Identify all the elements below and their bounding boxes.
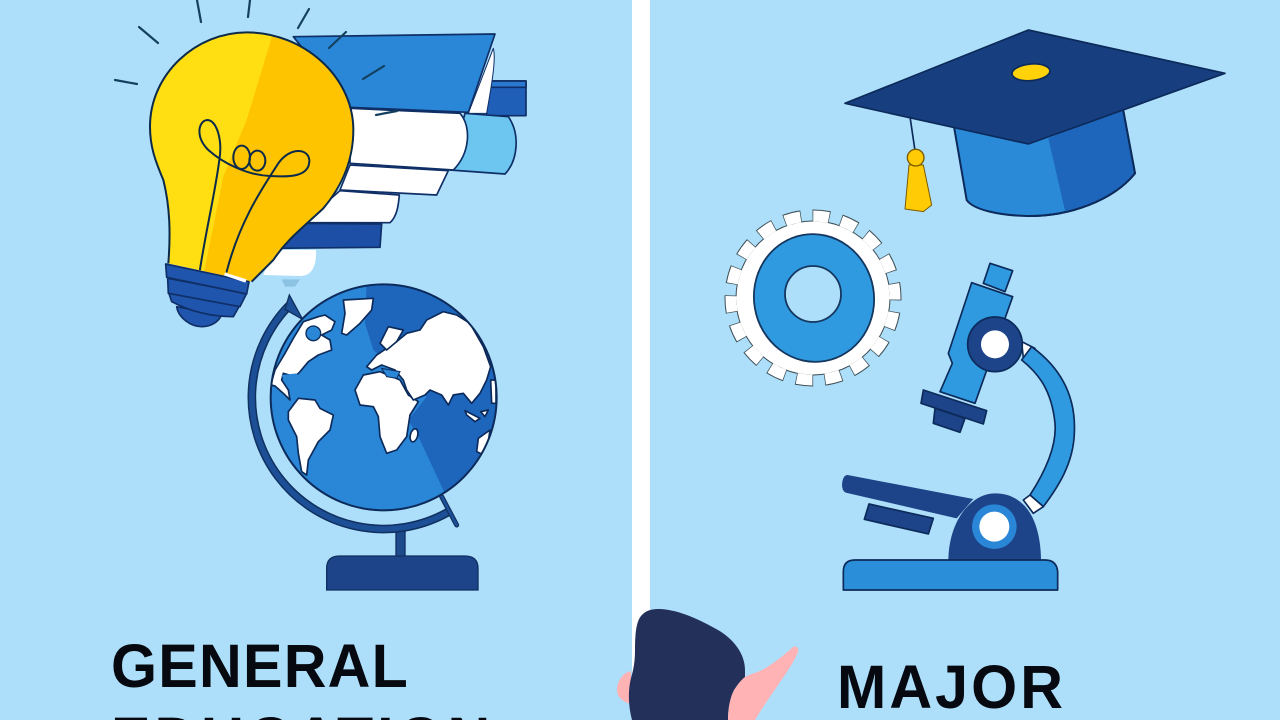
icon: gear <box>717 202 909 394</box>
icon: graduation cap <box>845 30 1225 216</box>
divider <box>632 0 650 720</box>
panel: right background <box>650 0 1280 720</box>
icon: globe <box>252 280 507 590</box>
heading: general education <box>111 632 490 720</box>
panel: left background <box>0 0 632 720</box>
icon: light bulb <box>150 30 367 327</box>
heading: general education: GENERAL <box>111 632 408 700</box>
figure: person head and hand <box>617 609 798 720</box>
icon: microscope <box>842 263 1074 590</box>
heading: major: MAJOR <box>837 653 1063 720</box>
icon: stack of books <box>263 34 526 287</box>
icon: light rays <box>115 0 397 115</box>
